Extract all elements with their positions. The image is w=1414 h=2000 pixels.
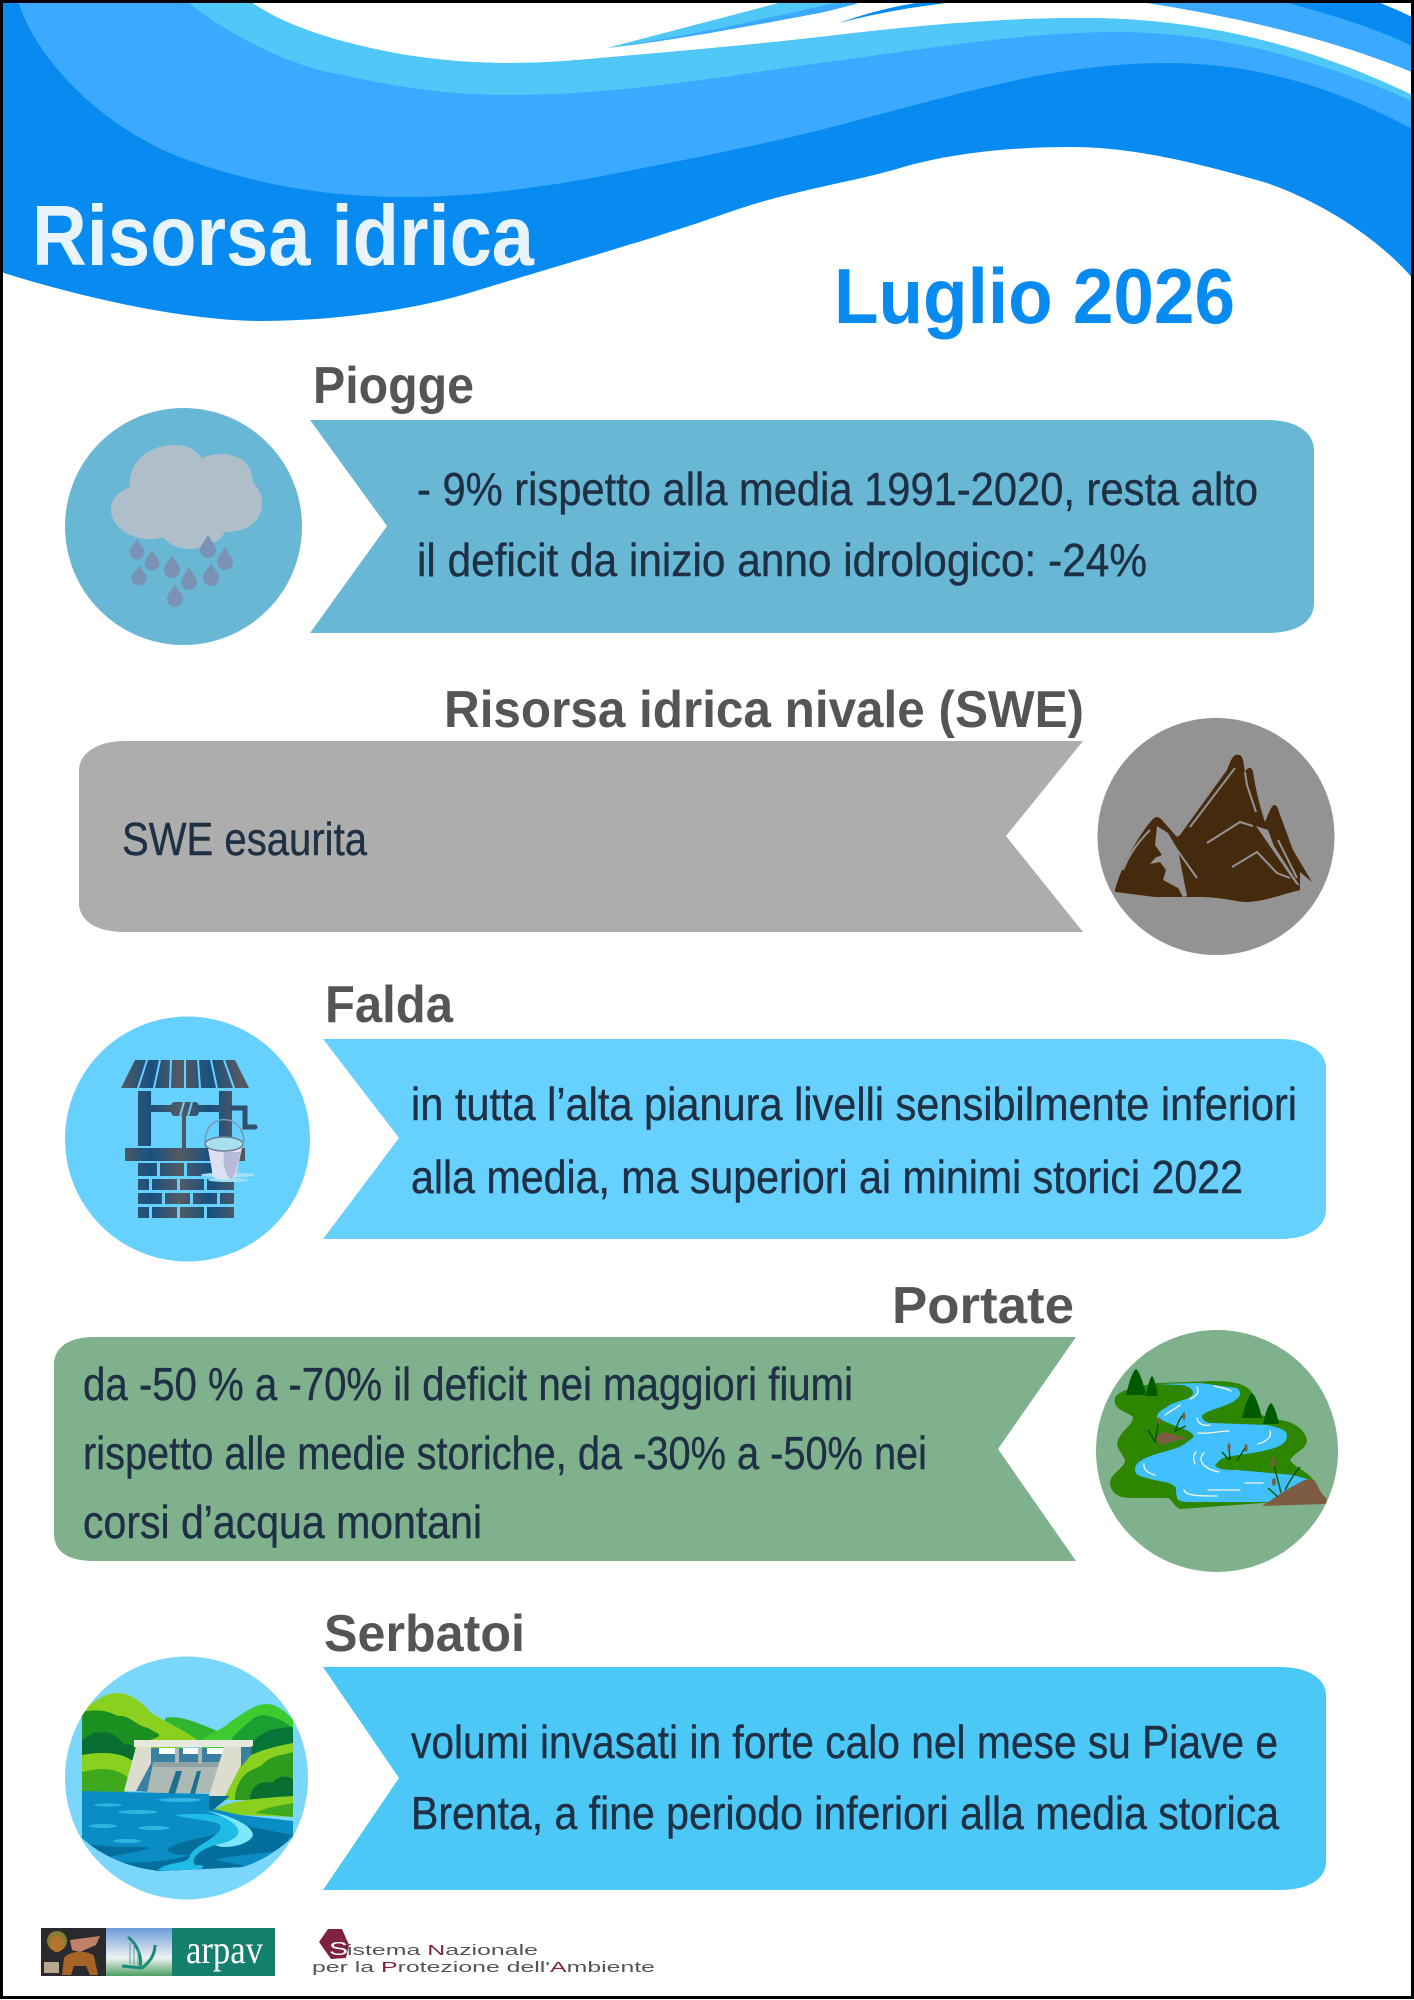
logo: arpav: arpav bbox=[186, 1927, 263, 1972]
ribbon: serbatoi bbox=[323, 1667, 1326, 1890]
text: portate bbox=[83, 1358, 927, 1548]
ribbon: piogge bbox=[310, 420, 1314, 633]
text: falda: in tutta l’alta pianura livelli sensibilmente inferiori bbox=[411, 1078, 1297, 1130]
ribbon: portate bbox=[54, 1337, 1076, 1561]
wave header bbox=[0, 0, 1414, 321]
text: portate: rispetto alle medie storiche, da -30% a -50% nei bbox=[83, 1427, 927, 1479]
icon: river bbox=[1096, 1330, 1338, 1572]
ribbon: swe bbox=[79, 741, 1083, 932]
panel: piogge bbox=[65, 357, 1314, 645]
panel: serbatoi bbox=[65, 1605, 1326, 1910]
logo: sistema nazionale: per la P rotezione dell' A mbiente bbox=[312, 1959, 655, 1976]
text: portate: corsi d’acqua montani bbox=[83, 1496, 482, 1548]
logo: sistema nazionale bbox=[312, 1929, 655, 1976]
logo: arpav bbox=[41, 1927, 275, 1976]
text: portate: da -50 % a -70% il deficit nei maggiori fiumi bbox=[83, 1358, 853, 1410]
heading: piogge: Piogge bbox=[313, 357, 474, 415]
heading: serbatoi: Serbatoi bbox=[324, 1605, 525, 1663]
title: Risorsa idrica bbox=[32, 189, 535, 284]
icon: well bbox=[65, 1016, 310, 1262]
heading: risorsa idrica nivale: Risorsa idrica nivale (SWE) bbox=[444, 681, 1084, 739]
panel: falda bbox=[65, 976, 1326, 1262]
text: swe: SWE esaurita bbox=[122, 813, 367, 865]
logo: sistema nazionale: S bbox=[329, 1939, 348, 1959]
text: serbatoi: volumi invasati in forte calo nel mese su Piave e bbox=[411, 1716, 1278, 1768]
text: falda: alla media, ma superiori ai minimi storici 2022 bbox=[411, 1151, 1243, 1203]
text: serbatoi bbox=[411, 1716, 1279, 1839]
text: serbatoi: Brenta, a fine periodo inferiori alla media storica bbox=[411, 1787, 1279, 1839]
text: piogge: il deficit da inizio anno idrologico: -24% bbox=[417, 534, 1147, 586]
ribbon: falda bbox=[323, 1039, 1326, 1239]
panel: portate bbox=[54, 1277, 1338, 1572]
icon: dam bbox=[65, 1656, 308, 1910]
heading: falda: Falda bbox=[325, 976, 454, 1034]
text: piogge bbox=[417, 463, 1258, 586]
heading: portate: Portate bbox=[892, 1277, 1074, 1335]
panel: risorsa idrica nivale bbox=[79, 681, 1334, 955]
text: piogge: - 9% rispetto alla media 1991-2020, resta alto bbox=[417, 463, 1258, 515]
icon: mountains bbox=[1098, 718, 1334, 955]
icon: rain cloud bbox=[65, 408, 302, 645]
date heading: Luglio 2026 bbox=[834, 252, 1235, 340]
logo: sistema nazionale: istema N azionale bbox=[347, 1942, 538, 1959]
text: falda bbox=[411, 1078, 1297, 1203]
